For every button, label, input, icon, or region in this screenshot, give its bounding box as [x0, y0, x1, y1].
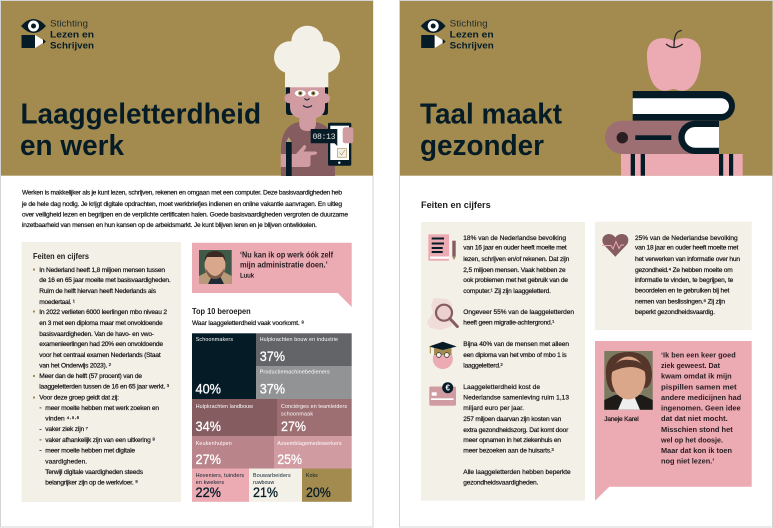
- bullet list: examenleerlingen had 20% een onvoldoende: [39, 341, 163, 348]
- callout: quote Luuk: [192, 243, 352, 307]
- facts text: meer opnamen in het ziekenhuis en: [463, 437, 561, 444]
- bullet list: Meer dan de helft (57 procent) van de: [39, 373, 142, 380]
- cell: Bouwarbeiders ruwbouw 21%: 21%: [253, 485, 278, 500]
- panel: facts right: [595, 222, 752, 330]
- facts text: 257 miljoen daarvan zijn kosten van: [463, 416, 562, 423]
- bullet list: vaker afhankelijk zijn van een uitkering ⁸: [45, 437, 155, 444]
- cell: Keukenhulpen 27%: Keukenhulpen: [196, 441, 232, 447]
- heading: feiten en cijfers: Feiten en cijfers: [33, 251, 89, 261]
- logo: Stichting Lezen en Schrijven: [21, 18, 94, 50]
- icon: magnifier over map: [427, 298, 457, 330]
- quote text: dat dat niet mocht.: [661, 414, 728, 423]
- bullet list: In 2022 verlieten 6000 leerlingen mbo niveau 2: [39, 309, 167, 316]
- quote text: pispillen samen met: [661, 382, 737, 392]
- facts text: [635, 235, 740, 316]
- panel: right page: [400, 0, 772, 527]
- logo: Stichting Lezen en Schrijven: Lezen en: [50, 30, 94, 40]
- facts text: [463, 235, 574, 487]
- top book: [633, 91, 735, 121]
- logo: Stichting Lezen en Schrijven: Schrijven: [450, 40, 494, 50]
- cell: Hulpkrachten landbouw 34%: Hulpkrachten landbouw: [196, 404, 253, 410]
- icon: bank card with euro: €: [445, 384, 450, 392]
- cell: Koks 20%: Koks: [306, 473, 318, 479]
- bullet list: [33, 267, 171, 487]
- facts text: nemen van beslissingen.⁵ Zij zijn: [635, 299, 725, 306]
- facts text: beperkt gezondheidsvaardig.: [635, 309, 715, 316]
- quote text: andere medicijnen had: [661, 393, 742, 402]
- bullet list: voor het centraal examen Nederlands (Staat: [39, 352, 161, 359]
- intro text: inzetbaarheid van mensen en hun kansen op de arbeidsmarkt. Je kunt blijven leren en je blijven ontwikkelen.: [22, 222, 317, 229]
- quote text: kwam omdat ik mijn: [661, 372, 732, 380]
- facts text: Alle laaggeletterden hebben beperkte: [463, 469, 571, 476]
- quote text: ‘Nu kan ik op werk óók zelf: [240, 250, 333, 259]
- header band: [1, 1, 373, 176]
- cell: Schoonmakers 40%: [192, 333, 256, 399]
- intro text: Werken is makkelijker als je kunt lezen, schrijven, rekenen en omgaan met een computer. Deze basisvaardigheden heb: [22, 189, 342, 196]
- facts text: heeft geen migratie-achtergrond.¹: [463, 320, 555, 327]
- cell: Hulpkrachten bouw en industrie 37%: [256, 333, 352, 366]
- cell: Bouwarbeiders ruwbouw 21%: ruwbouw: [253, 480, 274, 486]
- cell: Schoonmakers 40%: Schoonmakers: [196, 337, 233, 343]
- facts text: informatie te vinden, te begrijpen, te: [635, 277, 734, 284]
- cell: Schoonmakers 40%: 40%: [196, 382, 221, 397]
- bullet list: In Nederland heeft 1,8 miljoen mensen tussen: [39, 267, 165, 274]
- quote text: Misschien stond het: [661, 425, 733, 434]
- header band: [400, 1, 772, 176]
- heading: feiten en cijfers: Feiten en cijfers: [421, 200, 491, 210]
- logo: Stichting Lezen en Schrijven: Stichting: [50, 18, 88, 28]
- cell: Hulpkrachten landbouw 34%: [192, 399, 277, 436]
- quote text: ‘Ik ben een keer goed: [661, 350, 736, 360]
- bullet list: Ruim de helft hiervan heeft Nederlands als: [39, 288, 157, 295]
- bullet list: belangrijker zijn op de werkvloer. ⁹: [45, 480, 138, 487]
- illustration: chef with tablet: [274, 26, 353, 176]
- heading: top 10 beroepen: Top 10 beroepen: [192, 306, 251, 316]
- middle book: [605, 121, 719, 154]
- bullet list: meer moeite hebben met digitale: [45, 448, 135, 455]
- cell: Hoveniers, tuinders en kwekers 22%: en kwekers: [196, 480, 224, 486]
- cell: Koks 20%: [302, 468, 352, 502]
- icon: graduate: [429, 342, 457, 369]
- facts text: laaggeletterd.²: [463, 363, 503, 370]
- facts text: computer.¹ Zij zijn laaggeletterd.: [463, 288, 551, 295]
- bullet list: vinden ⁴·⁵·⁶: [45, 416, 80, 423]
- bullet list: van het Onderwijs 2023). ²: [39, 363, 112, 370]
- facts text: miljard euro per jaar.: [463, 405, 524, 412]
- bullet list: vaardigheden.: [45, 459, 87, 466]
- facts text: meer bezoeken aan de huisarts.³: [463, 448, 554, 455]
- bullet list: laaggeletterden tussen de 16 en 65 jaar werkt. ³: [39, 384, 170, 391]
- title: [420, 98, 562, 162]
- photo: Janeje Karel: [604, 351, 653, 410]
- logo: Stichting Lezen en Schrijven: Schrijven: [50, 40, 94, 50]
- facts text: extra gezondheidszorg. Dat komt door: [463, 427, 569, 434]
- cell: Bouwarbeiders ruwbouw 21%: Bouwarbeiders: [253, 473, 291, 479]
- photo: Luuk: [199, 250, 232, 284]
- cell: Conciërges en teamleiders schoonmaak 27%: 27%: [281, 419, 306, 434]
- logo: Stichting Lezen en Schrijven: [421, 18, 494, 50]
- cell: Hoveniers, tuinders en kwekers 22%: 22%: [196, 485, 221, 500]
- facts text: 25% van de Nederlandse bevolking: [635, 235, 738, 242]
- bullet list: Terwijl digitale vaardigheden steeds: [45, 469, 144, 476]
- quote text: [660, 350, 742, 466]
- cell: Hulpkrachten bouw en industrie 37%: Hulpkrachten bouw en industrie: [260, 337, 338, 343]
- bullet list: basisvaardigheden. Van de havo- en vwo-: [39, 331, 154, 338]
- cell: Conciërges en teamleiders schoonmaak 27%: schoonmaak: [281, 411, 313, 417]
- panel: facts left: [421, 222, 585, 501]
- quote text: wel op het doosje.: [660, 436, 723, 444]
- intro text: over veiligheid lezen en begrijpen en de verplichte certificaten halen. Goede basisvaardigheden vergroten de duurzame: [22, 212, 348, 219]
- cell: Assemblagemedewerkers 25%: Assemblagemedewerkers: [277, 441, 342, 447]
- treemap chart: top 10 beroepen: [192, 333, 352, 502]
- logo: Stichting Lezen en Schrijven: Stichting: [450, 18, 488, 28]
- cell: Bouwarbeiders ruwbouw 21%: [249, 468, 302, 502]
- intro text: je de hele dag nodig. Je krijgt digitale opdrachten, moet werkbriefjes indienen en online vakantie aanvragen. En uitleg: [21, 201, 342, 208]
- facts text: ook problemen met het gebruik van de: [463, 277, 568, 284]
- cell: Conciërges en teamleiders schoonmaak 27%: [277, 399, 352, 436]
- heading: top 10 beroepen: Waar laaggeletterdheid vaak voorkomt. ⁸: [192, 320, 304, 327]
- title: Taal maakt: [420, 98, 562, 130]
- panel: left page: [0, 0, 373, 527]
- cell: Productiemachinebedieners 37%: 37%: [260, 382, 285, 397]
- cell: Hoveniers, tuinders en kwekers 22%: Hoveniers, tuinders: [196, 473, 244, 479]
- cell: Assemblagemedewerkers 25%: 25%: [277, 452, 302, 467]
- facts text: van 18 jaar en ouder heeft moeite met: [635, 245, 738, 252]
- cell: Keukenhulpen 27%: [192, 436, 274, 468]
- facts text: Nederlandse samenleving ruim 1,13: [463, 395, 569, 402]
- bullet list: moedertaal. ¹: [39, 299, 76, 306]
- callout: quote Luuk: mijn administratie doen.’: [240, 260, 328, 269]
- heading: top 10 beroepen: [192, 306, 304, 327]
- cell: Assemblagemedewerkers 25%: [274, 436, 352, 468]
- cell: Hulpkrachten bouw en industrie 37%: 37%: [260, 349, 285, 364]
- intro text: [21, 189, 348, 229]
- bottom book: [621, 154, 743, 176]
- facts text: gezondheid.⁴ Ze hebben moeite om: [635, 267, 733, 274]
- quote text: ziek geweest. Dat: [661, 361, 720, 370]
- title: gezonder: [420, 130, 544, 162]
- illustration: chef with tablet: 08:13: [312, 133, 336, 142]
- title: en werk: [20, 130, 124, 162]
- cell: Hoveniers, tuinders en kwekers 22%: [192, 468, 249, 502]
- bullet list: vaker ziek zijn ⁷: [45, 426, 89, 433]
- icon: heart with pulse: [602, 234, 628, 257]
- facts text: Ongeveer 55% van de laaggeletterden: [463, 309, 574, 316]
- apple: [647, 30, 701, 91]
- facts text: Bijna 40% van de mensen met alleen: [463, 341, 569, 348]
- icon: bank card with euro: [429, 382, 456, 406]
- cell: Productiemachinebedieners 37%: [256, 366, 352, 399]
- cell: Conciërges en teamleiders schoonmaak 27%: Conciërges en teamleiders: [281, 404, 347, 410]
- callout: quote Janeje Karel: [595, 341, 752, 501]
- facts text: beoordelen en te gebruiken bij het: [635, 288, 729, 295]
- bullet list: en 3 met een diploma maar met onvoldoende: [39, 320, 163, 327]
- bullet list: Voor deze groep geldt dat zij:: [39, 395, 119, 402]
- quote text: Maar dat kon ik toen: [661, 446, 732, 455]
- icon: notebook and pencil: [428, 234, 456, 261]
- facts text: het verwerken van informatie over hun: [635, 256, 740, 263]
- facts text: van 16 jaar en ouder heeft moeite met: [463, 245, 567, 252]
- quote text: nog niet lezen.’: [661, 456, 714, 466]
- facts text: een diploma van het vmbo of mbo 1 is: [463, 352, 567, 359]
- facts text: Laaggeletterdheid kost de: [463, 384, 540, 391]
- facts text: lezen, schrijven en/of rekenen. Dat zijn: [463, 256, 570, 263]
- cell: Koks 20%: 20%: [306, 485, 331, 500]
- cell: Keukenhulpen 27%: 27%: [196, 452, 221, 467]
- title: Laaggeletterdheid: [20, 98, 261, 130]
- cell: Hulpkrachten landbouw 34%: 34%: [196, 419, 221, 434]
- logo: Stichting Lezen en Schrijven: Lezen en: [450, 30, 494, 40]
- caption: Janeje Karel: [604, 416, 639, 423]
- facts text: 2,5 miljoen mensen. Vaak hebben ze: [463, 267, 566, 274]
- cell: Productiemachinebedieners 37%: Productiemachinebedieners: [260, 370, 330, 376]
- bullet list: meer moeite hebben met werk zoeken en: [45, 405, 159, 412]
- facts text: 18% van de Nederlandse bevolking: [463, 235, 566, 242]
- quote text: ingenomen. Geen idee: [661, 404, 741, 412]
- callout: quote Luuk: Luuk: [240, 272, 255, 280]
- illustration: apple on books: [605, 30, 743, 176]
- bullet list: de 16 en 65 jaar moeite met basisvaardigheden.: [39, 277, 171, 284]
- facts text: gezondheidsvaardigheden.: [463, 480, 538, 487]
- panel: feiten en cijfers: [22, 242, 181, 502]
- title: [20, 98, 261, 162]
